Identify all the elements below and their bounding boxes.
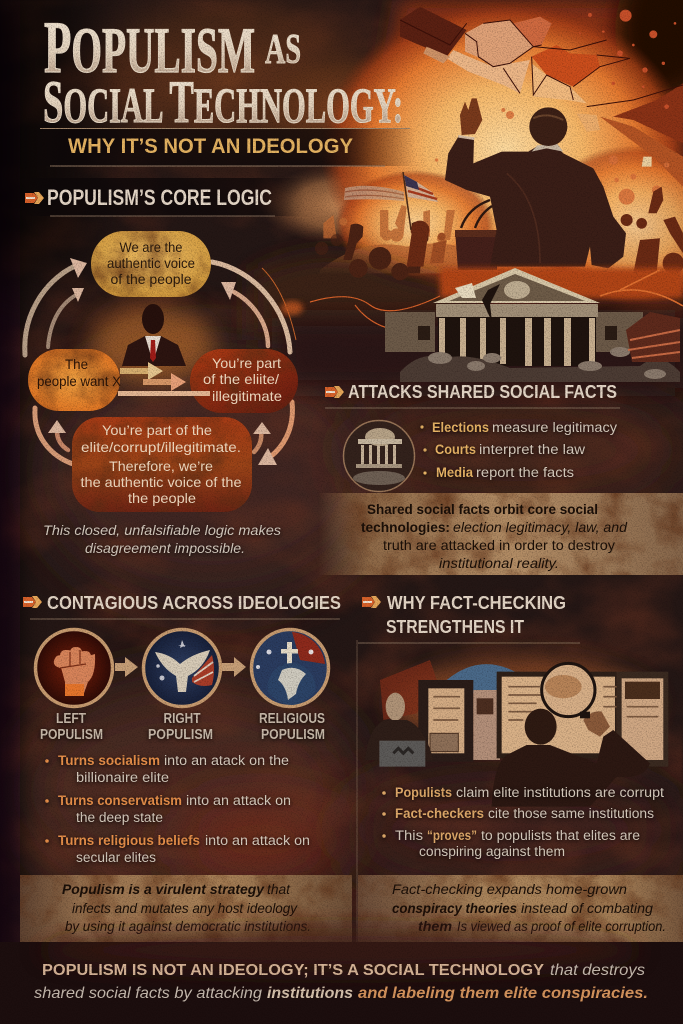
illustration: checking documents — [365, 657, 668, 807]
tan callout: Shared social facts orbit core social — [367, 501, 598, 517]
pill: bottom: the people — [128, 491, 196, 506]
subtitle: WHY IT’S NOT AN IDEOLOGY — [68, 135, 353, 158]
bullet list: secular elites — [76, 850, 156, 865]
bullet list: Fact-checkers — [395, 806, 484, 821]
bullet list: claim elite institutions are corrupt — [456, 785, 664, 800]
bullet list: Turns religious beliefs — [58, 833, 200, 848]
footer conclusion: institutions — [267, 985, 353, 1002]
bullet list: interpret the law — [479, 442, 585, 457]
bullet list — [420, 420, 617, 480]
bullet list: billionaire elite — [76, 770, 169, 785]
bullet list: conspiring against them — [419, 844, 565, 859]
tan callout: Fact-checking expands home-grown — [392, 881, 627, 897]
tan callout: instead of combating — [521, 900, 653, 916]
title word as: AS — [265, 27, 301, 73]
icon: eagle medallion — [144, 630, 220, 706]
tan callout: that — [267, 881, 291, 897]
bullet list: “proves” — [427, 828, 477, 843]
pill: left: The — [65, 357, 88, 372]
icon: globe and cross medallion — [252, 630, 328, 706]
cracked government building — [385, 268, 680, 382]
panel: why fact-checking strengthens it — [358, 592, 683, 942]
bullet list: to populists that elites are — [481, 828, 640, 843]
tan callout — [20, 875, 352, 942]
pill: top: We are the — [120, 240, 183, 255]
pill: bottom: the authentic voice of the — [80, 475, 242, 490]
footer conclusion: shared social facts by attacking — [34, 985, 262, 1002]
heading icon — [25, 192, 44, 204]
pill: bottom — [72, 417, 252, 512]
speaker silhouette — [445, 98, 626, 268]
tan callout: infects and mutates any host ideology — [72, 900, 298, 916]
medallion labels: LEFT — [56, 711, 86, 727]
heading: POPULISM’S CORE LOGIC — [47, 185, 272, 210]
bullet list: into an attack on — [186, 793, 291, 808]
toppled flag bricks — [626, 312, 680, 362]
bullet list: Elections — [432, 420, 489, 435]
caption italic — [43, 522, 281, 556]
pill: left — [28, 349, 121, 411]
pill: right: illegitimate — [212, 389, 282, 404]
bullet list: Turns conservatism — [58, 793, 182, 808]
pill: top: authentic voice — [107, 256, 195, 271]
hero fire glow — [40, 0, 683, 305]
caption italic: disagreement impossible. — [85, 540, 245, 556]
tan callout — [358, 875, 683, 942]
tan callout: Is viewed as proof of elite corruption. — [457, 918, 666, 934]
older man with laptop — [365, 693, 433, 767]
dark interior — [438, 316, 596, 366]
pill: top: of the people — [110, 272, 192, 287]
far crowd — [320, 205, 460, 273]
tan callout: conspiracy theories — [392, 900, 517, 916]
bullet list: This — [395, 828, 423, 843]
bullet list: into an atack on the — [164, 753, 289, 768]
icon: fist medallion — [36, 630, 112, 706]
heading: STRENGTHENS IT — [386, 616, 525, 637]
bullet list: report the facts — [476, 465, 574, 480]
shattered wall plates — [400, 7, 683, 205]
faded flag — [344, 186, 404, 201]
hero illustration: speaker before burning crowd — [40, 0, 683, 388]
heading: ATTACKS SHARED SOCIAL FACTS — [348, 381, 617, 402]
bullet list — [382, 785, 664, 859]
footer conclusion: POPULISM IS NOT AN IDEOLOGY; IT’S A SOCIAL TECHNOLOGY — [42, 962, 544, 979]
pediment — [433, 268, 600, 303]
tan callout: truth are attacked in order to destroy — [383, 537, 615, 553]
bullet list: cite those same institutions — [488, 806, 654, 821]
medallion labels: POPULISM — [40, 727, 103, 743]
title line 1: POPULISM — [44, 7, 255, 89]
pill: top — [91, 231, 211, 297]
footer conclusion — [0, 928, 683, 1024]
footer conclusion: that destroys — [550, 962, 645, 979]
right crowd — [407, 187, 683, 274]
tan callout: technologies: — [361, 519, 450, 535]
center arrows — [118, 362, 210, 396]
tan callout — [318, 493, 683, 575]
medallion labels — [40, 711, 325, 743]
icon: courthouse medallion — [344, 420, 414, 492]
steps and debris — [400, 356, 680, 382]
title line 2: SOCIAL TECHNOLOGY: — [43, 69, 403, 135]
pill: right — [190, 349, 298, 413]
bullet list: Courts — [435, 442, 476, 457]
bullet list — [45, 753, 310, 865]
pill: left: people want X — [37, 374, 121, 389]
heading — [386, 592, 566, 637]
bullet list: into an attack on — [205, 833, 310, 848]
caption italic: This closed, unfalsifiable logic makes — [43, 522, 281, 538]
glow behind figure — [91, 307, 215, 383]
heading icon — [325, 386, 344, 398]
heading icon — [362, 596, 381, 608]
bullet list: the deep state — [76, 810, 163, 825]
columns — [439, 318, 595, 366]
pill: right: of the eliite/ — [203, 372, 279, 387]
bullet list: measure legitimacy — [492, 420, 617, 435]
title — [40, 7, 410, 166]
medallion labels: RELIGIOUS — [259, 711, 325, 727]
entablature — [436, 304, 598, 317]
rubble and lava band — [440, 268, 683, 298]
tan callout: Populism is a virulent strategy — [62, 881, 265, 897]
footer conclusion: and labeling them elite conspiracies. — [358, 985, 648, 1002]
tan callout: them — [418, 918, 452, 934]
title block backdrop — [0, 0, 415, 280]
tan callout: institutional reality. — [439, 555, 559, 571]
man with magnifier — [492, 709, 650, 807]
panel: core logic — [25, 185, 298, 556]
tan callout: election legitimacy, law, and — [453, 519, 628, 535]
side wings — [385, 312, 643, 352]
arrow — [115, 657, 138, 677]
cycle arrows — [25, 258, 292, 466]
figure in suit — [122, 304, 186, 366]
pill: bottom: You’re part of the — [102, 423, 212, 438]
American flag — [403, 172, 438, 230]
heading icon — [23, 596, 42, 608]
medallion labels: POPULISM — [148, 727, 213, 743]
medallion labels: POPULISM — [261, 727, 325, 743]
pill: right: You’re part — [212, 356, 281, 371]
panel: attacks shared social facts — [318, 381, 683, 575]
dark ground left of crowd — [250, 254, 480, 340]
bullet list: Turns socialism — [58, 753, 160, 768]
panel: contagious across ideologies — [20, 593, 352, 942]
magnifying glass — [542, 663, 595, 718]
heading: WHY FACT-CHECKING — [387, 592, 566, 613]
arrow — [222, 657, 246, 677]
heading: CONTAGIOUS ACROSS IDEOLOGIES — [47, 593, 341, 613]
bullet list: Media — [436, 465, 473, 480]
medallion labels: RIGHT — [164, 711, 201, 727]
podium and microphones — [455, 200, 497, 270]
tan callout: by using it against democratic institutions. — [65, 918, 311, 934]
crack — [482, 284, 500, 322]
pill: bottom: elite/corrupt/illegitimate. — [81, 440, 241, 455]
near crowd fists — [315, 221, 429, 280]
bullet list: Populists — [395, 785, 452, 800]
pill: bottom: Therefore, we’re — [109, 459, 213, 474]
